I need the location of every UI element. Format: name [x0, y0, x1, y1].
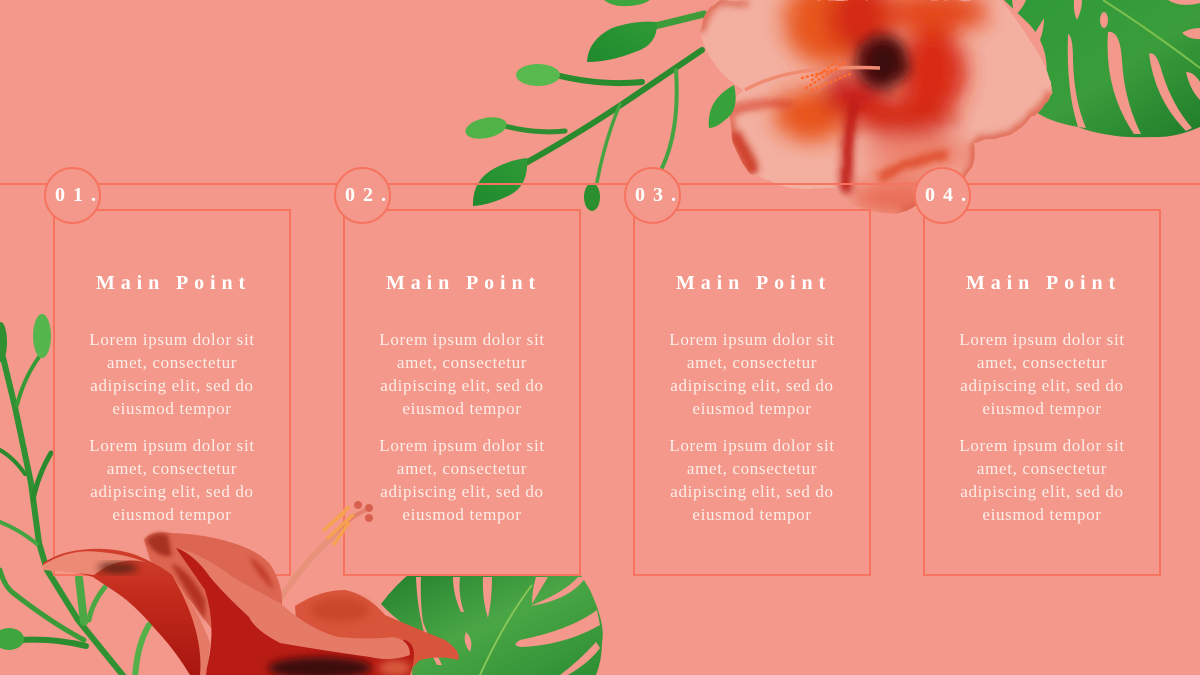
pale band on main petal: [175, 547, 410, 659]
body text 02 first paragraph: eiusmod tempor: [402, 399, 522, 418]
text card 02: [343, 209, 581, 576]
body text 02 second paragraph: [379, 436, 545, 524]
body text 02 second paragraph: eiusmod tempor: [402, 505, 522, 524]
body text 03 second paragraph: [669, 436, 835, 524]
body text 02 first paragraph: Lorem ipsum dolor sit: [379, 330, 545, 348]
back petal: [144, 532, 282, 640]
body text 02 first paragraph: [379, 330, 545, 418]
body text 03 first paragraph: [669, 330, 835, 418]
body text 02 second paragraph: amet, consectetur: [397, 459, 527, 478]
body text 03 first paragraph: Lorem ipsum dolor sit: [669, 330, 835, 348]
stems and buds: bottom left: [0, 314, 149, 675]
body text 01 second paragraph: eiusmod tempor: [112, 505, 232, 524]
heading 04: Main Point: [966, 272, 1121, 294]
hibiscus flower: top: [690, 0, 1060, 220]
body text 04 first paragraph: adipiscing elit, sed do: [960, 376, 1124, 395]
body text 03 second paragraph: eiusmod tempor: [692, 505, 812, 524]
body text 04 second paragraph: [959, 436, 1125, 524]
body text 02 first paragraph: amet, consectetur: [397, 353, 527, 372]
body text 04 second paragraph: eiusmod tempor: [982, 505, 1102, 524]
number badge 03: [624, 167, 681, 224]
body text 04 first paragraph: [959, 330, 1125, 418]
panel: point 03: [624, 167, 871, 576]
heading 03: Main Point: [676, 272, 831, 294]
branch and buds: top centre: [463, 0, 704, 211]
body text 01 first paragraph: [89, 330, 255, 418]
horizontal timeline line: [0, 183, 1200, 185]
body text 03 second paragraph: Lorem ipsum dolor sit: [669, 436, 835, 455]
body text 02 first paragraph: adipiscing elit, sed do: [380, 376, 544, 395]
left petal: [43, 549, 210, 675]
body text 04 first paragraph: eiusmod tempor: [982, 399, 1102, 418]
small leaf beside flower: [709, 85, 736, 128]
body text 01 first paragraph: amet, consectetur: [107, 353, 237, 372]
body text 03 first paragraph: eiusmod tempor: [692, 399, 812, 418]
text card 04: [923, 209, 1161, 576]
number badge 02: [334, 167, 391, 224]
body text 04 second paragraph: adipiscing elit, sed do: [960, 482, 1124, 501]
monstera leaf: top right: [1004, 0, 1200, 137]
body text 01 first paragraph: eiusmod tempor: [112, 399, 232, 418]
body text 03 first paragraph: adipiscing elit, sed do: [670, 376, 834, 395]
text card 01: [53, 209, 291, 576]
body text 01 second paragraph: [89, 436, 255, 524]
body text 04 first paragraph: Lorem ipsum dolor sit: [959, 330, 1125, 348]
body text 02 second paragraph: adipiscing elit, sed do: [380, 482, 544, 501]
body text 04 second paragraph: amet, consectetur: [977, 459, 1107, 478]
body text 02 second paragraph: Lorem ipsum dolor sit: [379, 436, 545, 455]
panel: point 02: [334, 167, 581, 576]
body text 01 first paragraph: adipiscing elit, sed do: [90, 376, 254, 395]
body text 04 second paragraph: Lorem ipsum dolor sit: [959, 436, 1125, 455]
number badge 04: [914, 167, 971, 224]
heading 01: Main Point: [96, 272, 251, 294]
body text 01 second paragraph: amet, consectetur: [107, 459, 237, 478]
main red body: [176, 548, 414, 675]
body text 03 second paragraph: amet, consectetur: [687, 459, 817, 478]
number badge 01: [44, 167, 101, 224]
body text 01 second paragraph: adipiscing elit, sed do: [90, 482, 254, 501]
monstera leaf: bottom: [381, 570, 603, 675]
body text 01 first paragraph: Lorem ipsum dolor sit: [89, 330, 255, 348]
body text 03 first paragraph: amet, consectetur: [687, 353, 817, 372]
body text 03 second paragraph: adipiscing elit, sed do: [670, 482, 834, 501]
text card 03: [633, 209, 871, 576]
heading 02: Main Point: [386, 272, 541, 294]
body text 01 second paragraph: Lorem ipsum dolor sit: [89, 436, 255, 455]
panel: point 04: [914, 167, 1161, 576]
body text 04 first paragraph: amet, consectetur: [977, 353, 1107, 372]
right petal: [295, 590, 459, 675]
panel: point 01: [44, 167, 291, 576]
